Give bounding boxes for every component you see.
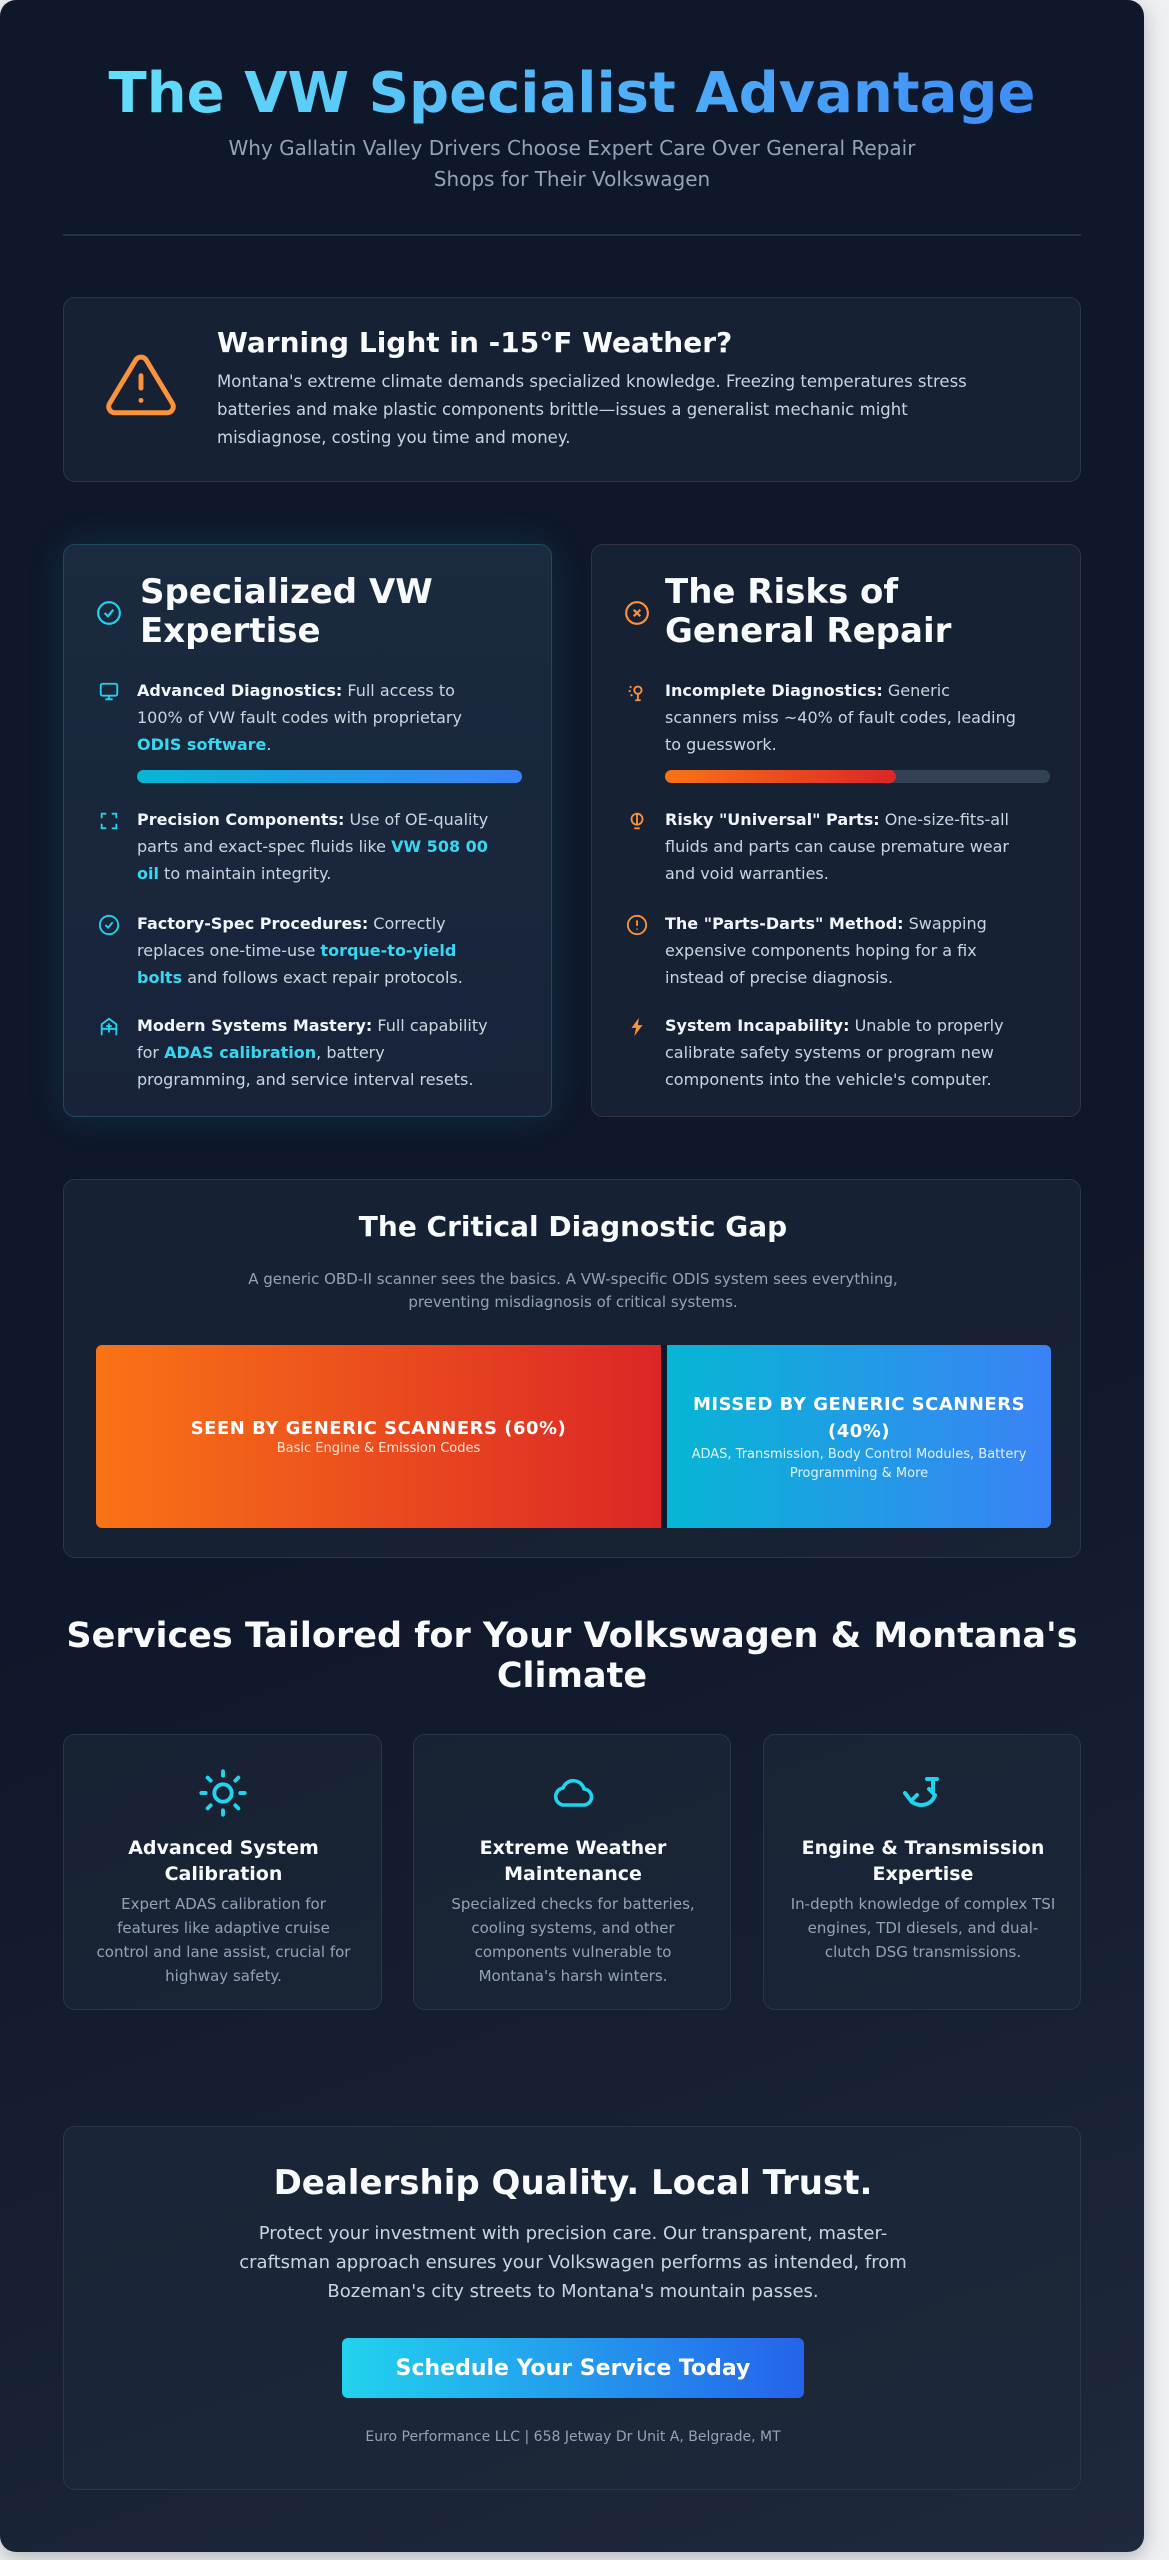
icon: cloud [554, 1778, 594, 1807]
card: advanced system calibration [63, 1734, 382, 2010]
panel: critical diagnostic gap [63, 1179, 1081, 1558]
button: Schedule Your Service Today [396, 2356, 750, 2380]
card: engine & transmission expertise [763, 1734, 1081, 2010]
progress bar: 100% [137, 770, 522, 783]
text: warning body: Montana's extreme climate demands specialized knowledge. Freezing temperatures stress batteries and make plastic components brittle—issues a generalist mechanic might misdiagnose, costing you time and money. [217, 372, 967, 447]
footer text: Euro Performance LLC | 658 Jetway Dr Unit A, Belgrade, MT [365, 2429, 781, 2445]
text [239, 2223, 907, 2302]
heading [665, 572, 952, 651]
icon: check circle [97, 601, 121, 625]
item: modern systems mastery [100, 1016, 488, 1089]
item: advanced diagnostics: 100% of VW fault codes with proprietary [137, 708, 462, 727]
title: The VW Specialist Advantage [109, 61, 1035, 126]
item: parts-darts: The "Parts-Darts" Method: Swapping expensive components hoping for a fix instead of precise diagnosis. [665, 914, 987, 987]
title [0, 56, 1144, 132]
text: Protect your investment with precision care. Our transparent, master- [259, 2223, 887, 2244]
item: universal parts: Risky "Universal" Parts: One-size-fits-all fluids and parts can cause premature wear and void warranties. [665, 810, 1009, 883]
card: advanced system calibration: Advanced System Calibration [128, 1837, 319, 1885]
item: modern systems mastery: Modern Systems Mastery: Full capability [137, 1016, 488, 1035]
item: modern systems mastery: programming, and service interval resets. [137, 1070, 473, 1089]
card: advanced system calibration: Expert ADAS calibration for features like adaptive cruise control and lane assist, crucial for highway safety. [97, 1895, 350, 1985]
item: advanced diagnostics: Advanced Diagnostics: Full access to [137, 681, 455, 700]
text: A generic OBD-II scanner sees the basics. A VW-specific ODIS system sees everything, preventing misdiagnosis of critical systems. [248, 1270, 898, 1311]
heading: General Repair [665, 611, 951, 651]
button [342, 2338, 804, 2398]
item: advanced diagnostics [100, 681, 462, 754]
heading: The Risks of [665, 572, 898, 612]
item: incomplete diagnostics: to guesswork. [665, 735, 777, 754]
item: incomplete diagnostics: Incomplete Diagnostics: Generic [665, 681, 950, 700]
heading: Dealership Quality. Local Trust. [274, 2163, 872, 2203]
subtitle: Shops for Their Volkswagen [434, 167, 710, 191]
panel: call to action [63, 2126, 1081, 2490]
item: modern systems mastery: for ADAS calibration, battery [137, 1043, 385, 1062]
item: incomplete diagnostics [628, 681, 1016, 754]
item: system incapability: System Incapability: Unable to properly calibrate safety systems or program new components into the vehicle's computer. [665, 1016, 1004, 1089]
card: extreme weather maintenance [413, 1734, 731, 2010]
card: extreme weather maintenance: Specialized checks for batteries, cooling systems, and other components vulnerable to Montana's harsh winters. [451, 1895, 695, 1985]
segment: missed 40% [667, 1345, 1051, 1528]
icon: warning triangle [106, 354, 176, 416]
subtitle [229, 136, 916, 191]
card: engine & transmission expertise: In-depth knowledge of complex TSI engines, TDI diesels, and dual-clutch DSG transmissions. [791, 1895, 1055, 1961]
text: Bozeman's city streets to Montana's mountain passes. [327, 2281, 819, 2302]
icon: sun [199, 1769, 247, 1817]
text: craftsman approach ensures your Volkswagen performs as intended, from [239, 2252, 907, 2273]
heading: The Critical Diagnostic Gap [359, 1210, 787, 1243]
icon: x circle [625, 601, 649, 625]
heading: warning: Warning Light in -15°F Weather? [217, 326, 732, 359]
card: extreme weather maintenance: Extreme Weather Maintenance [480, 1837, 666, 1885]
segment: missed 40%: ADAS, Transmission, Body Control Modules, Battery Programming & More [692, 1446, 1026, 1480]
subtitle: Why Gallatin Valley Drivers Choose Expert Care Over General Repair [229, 136, 915, 160]
panel: warning callout [63, 297, 1081, 482]
progress bar: 60% [665, 770, 1050, 783]
chart: split bar [96, 1345, 1051, 1528]
heading: services: Services Tailored for Your Volkswagen & Montana's Climate [66, 1616, 1078, 1696]
segment: missed 40%: MISSED BY GENERIC SCANNERS (40%) [693, 1394, 1025, 1442]
item: precision components: Precision Components: Use of OE-quality parts and exact-spec fluids like VW 508 00 oil to maintain integrity. [137, 810, 488, 883]
segment: seen 60%: Basic Engine & Emission Codes [277, 1440, 480, 1456]
heading [140, 572, 433, 651]
item: incomplete diagnostics: scanners miss ~40% of fault codes, leading [665, 708, 1016, 727]
card: engine & transmission expertise: Engine & Transmission Expertise [802, 1837, 1044, 1885]
item: advanced diagnostics: ODIS software. [137, 735, 271, 754]
icon: engine arrow [902, 1777, 939, 1807]
panel: specialized VW expertise [63, 544, 552, 1117]
panel: risks of general repair [591, 544, 1081, 1117]
heading: Specialized VW [140, 572, 433, 612]
item: factory-spec procedures: Factory-Spec Procedures: Correctly replaces one-time-use torque-to-yield bolts and follows exact repair protocols. [137, 914, 463, 987]
segment: seen 60% [96, 1345, 667, 1528]
segment: seen 60%: SEEN BY GENERIC SCANNERS (60%) [191, 1418, 566, 1438]
heading: Expertise [140, 611, 321, 651]
